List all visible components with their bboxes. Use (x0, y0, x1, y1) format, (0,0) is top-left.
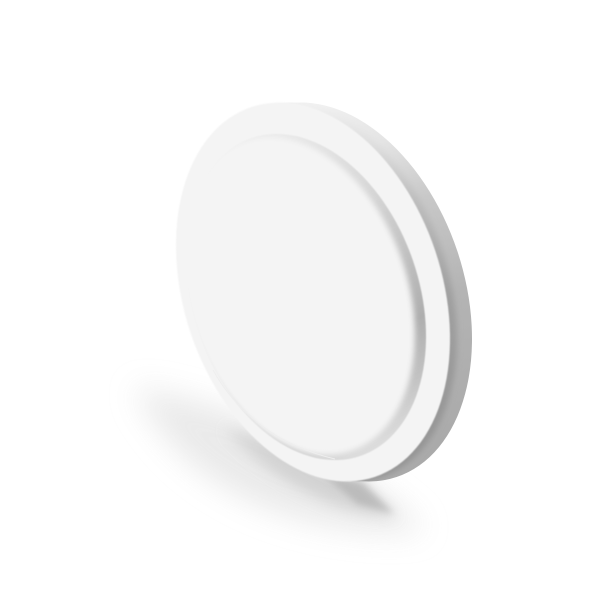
panel lower-left edge line (213, 370, 335, 459)
inner raised panel (141, 105, 455, 487)
illustration: white 3D disc (145, 102, 472, 535)
disc side wall (288, 102, 472, 482)
disc front face (176, 103, 451, 482)
inner step shadow (244, 134, 426, 460)
ground shadow (135, 388, 425, 532)
